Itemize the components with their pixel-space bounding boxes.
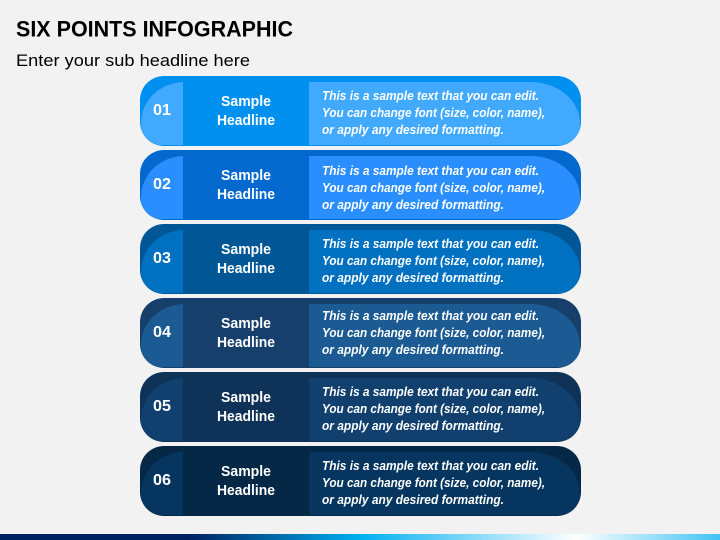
panel: point 04: 04: [153, 324, 171, 341]
panel: point 03: You can change font (size, color, name),: [322, 254, 545, 268]
panel: point 02: 02: [153, 176, 171, 193]
title: SIX POINTS INFOGRAPHIC: [16, 16, 293, 42]
panel: point 05: Sample: [221, 390, 271, 406]
panel: point 04: Sample: [221, 316, 271, 332]
panel: point 03: This is a sample text that you can edit.: [322, 237, 539, 251]
panel: point 01: This is a sample text that you can edit.: [322, 89, 539, 103]
panel: point 04: or apply any desired formatting.: [322, 343, 504, 357]
panel: point 01: [140, 76, 581, 146]
panel: point 06: Sample: [221, 464, 271, 480]
panel: point 02: Headline: [217, 187, 275, 203]
panel: point 03: 03: [153, 250, 171, 267]
panel: point 02: or apply any desired formatting.: [322, 198, 504, 212]
panel: point 03: or apply any desired formatting.: [322, 271, 504, 285]
panel: point 05: You can change font (size, color, name),: [322, 402, 545, 416]
panel: point 06: Headline: [217, 483, 275, 499]
panel: point 01: or apply any desired formatting.: [322, 123, 504, 137]
panel: point 03: Headline: [217, 261, 275, 277]
panel: point 02: Sample: [221, 168, 271, 184]
panel: point 02: You can change font (size, color, name),: [322, 181, 545, 195]
panel: point 05: or apply any desired formatting.: [322, 419, 504, 433]
panel: point 04: [140, 298, 581, 368]
panel: point 03: Sample: [221, 242, 271, 258]
panel: point 06: [140, 446, 581, 516]
panel: point 04: This is a sample text that you can edit.: [322, 309, 539, 323]
panel: point 06: This is a sample text that you can edit.: [322, 459, 539, 473]
footer gradient bar: [0, 534, 720, 540]
panel: point 05: 05: [153, 398, 171, 415]
panel: point 01: Headline: [217, 113, 275, 129]
panel: point 05: This is a sample text that you can edit.: [322, 385, 539, 399]
panel: point 01: You can change font (size, color, name),: [322, 106, 545, 120]
panel: point 05: [140, 372, 581, 442]
panel: point 06: 06: [153, 472, 171, 489]
panel: point 02: This is a sample text that you can edit.: [322, 164, 539, 178]
subtitle: Enter your sub headline here: [16, 51, 250, 70]
panel: point 05: Headline: [217, 409, 275, 425]
panel: point 04: Headline: [217, 335, 275, 351]
panel: point 01: 01: [153, 102, 171, 119]
panel: point 06: or apply any desired formatting.: [322, 493, 504, 507]
panel: point 04: You can change font (size, color, name),: [322, 326, 545, 340]
panel: point 03: [140, 224, 581, 294]
panel: point 06: You can change font (size, color, name),: [322, 476, 545, 490]
panel: point 01: Sample: [221, 94, 271, 110]
panel: point 02: [140, 150, 581, 220]
